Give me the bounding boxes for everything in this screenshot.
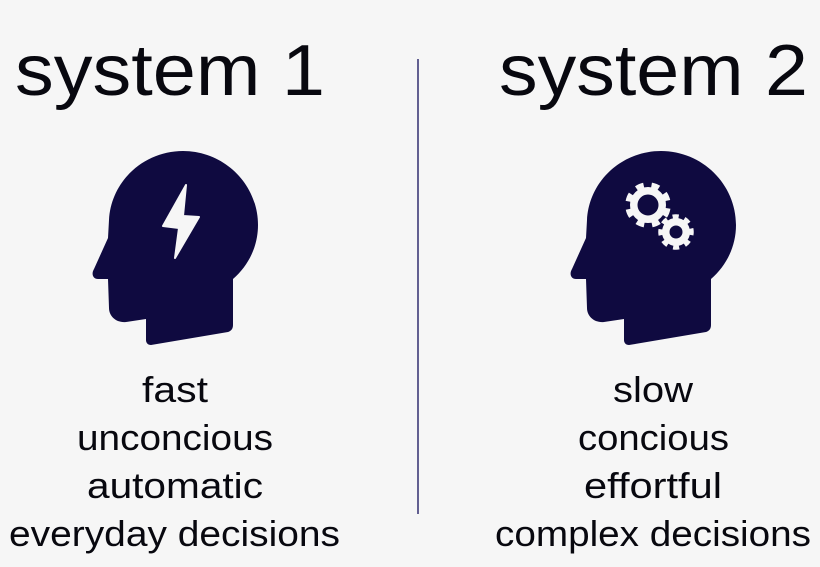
heading: system 2: system 2 (499, 31, 808, 111)
text: system 2 traits: slow (613, 369, 694, 410)
text: system 2 traits: complex decisions (495, 513, 811, 554)
text: system 1 traits: automatic (87, 465, 263, 506)
heading: system 1: system 1 (15, 31, 325, 111)
text: system 1 traits: fast (142, 369, 208, 410)
text: system 2 traits (495, 369, 811, 554)
text: system 1 traits (9, 369, 340, 554)
icon: head with gears (571, 151, 736, 345)
icon: large gear (622, 179, 674, 231)
text: system 2 traits: concious (578, 417, 729, 458)
icon: small gear (660, 216, 692, 248)
text: system 2 traits: effortful (584, 465, 722, 506)
divider line (417, 59, 419, 514)
panel: system 1 (9, 31, 340, 554)
text: system 1 traits: everyday decisions (9, 513, 340, 554)
panel: system 2 (495, 31, 811, 554)
icon: head with lightning bolt (93, 151, 258, 345)
text: system 1 traits: unconcious (77, 417, 273, 458)
